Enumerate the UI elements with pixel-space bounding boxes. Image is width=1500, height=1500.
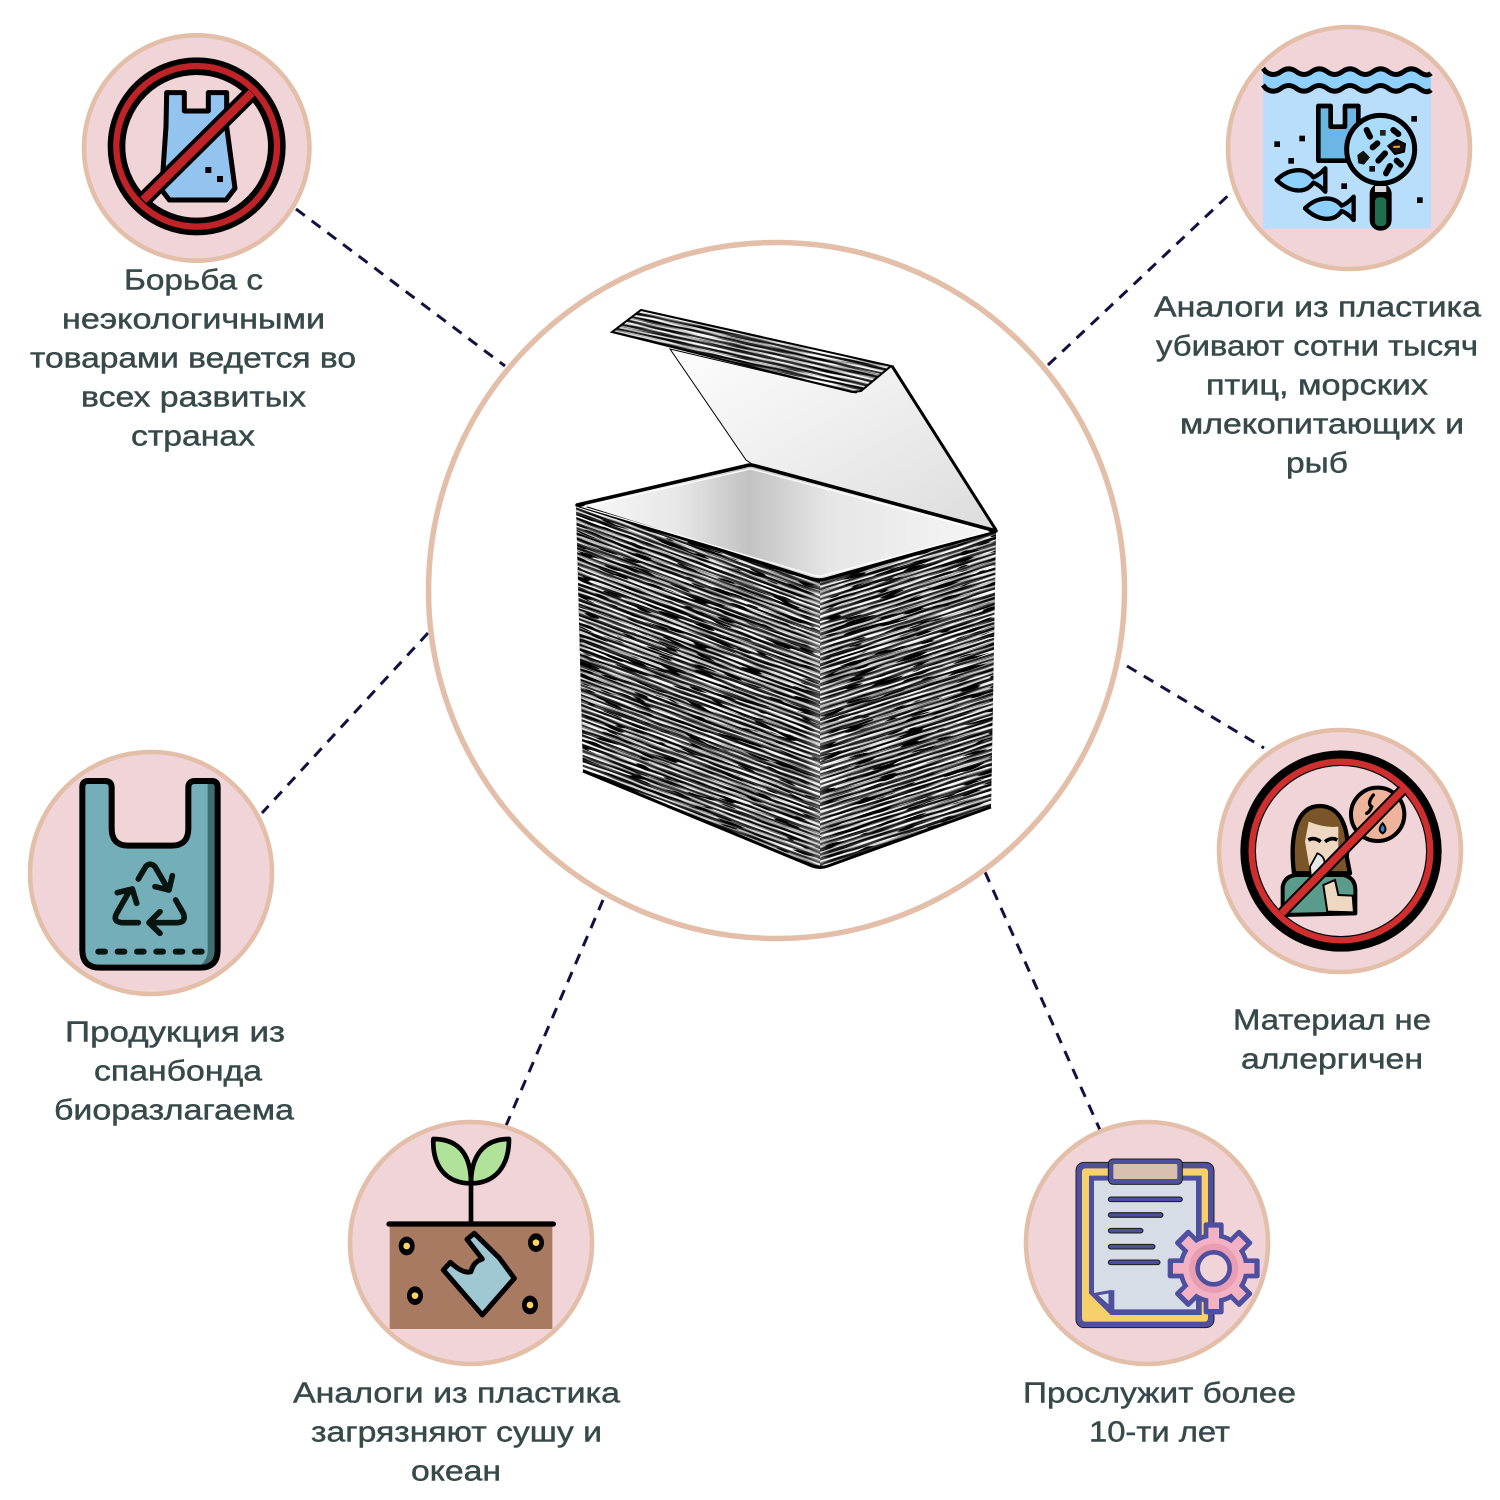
text: bottom left: океан <box>411 1456 501 1488</box>
text: top right: Аналоги из пластика <box>1154 292 1482 324</box>
icon circle: biodegradable bag <box>30 752 272 994</box>
text: bottom right: 10-ти лет <box>1089 1416 1230 1448</box>
box inner cavity <box>577 465 996 580</box>
text: top right <box>1154 292 1482 480</box>
text: top left: Борьба с <box>124 264 263 296</box>
icon circle: soil pollution <box>350 1122 592 1364</box>
dashed connector lines <box>262 190 1264 1130</box>
text: middle left: Продукция из <box>65 1016 285 1048</box>
box lid front strip <box>614 312 888 391</box>
text: top right: рыб <box>1286 448 1348 480</box>
text: middle left <box>54 1016 295 1126</box>
box lid inner side <box>670 349 996 530</box>
text: middle right: Материал не <box>1233 1004 1431 1036</box>
box right face <box>820 532 996 869</box>
box left face <box>576 506 820 869</box>
text: top left: странах <box>131 420 256 452</box>
text: top right: убивают сотни тысяч <box>1156 330 1478 362</box>
text: middle left: биоразлагаема <box>54 1094 295 1126</box>
icon: sprout and bag in soil <box>389 1139 553 1329</box>
icon circle: ocean pollution <box>1228 27 1470 269</box>
icon: crossed allergy <box>1244 754 1438 948</box>
text: top left: неэкологичными <box>62 304 325 336</box>
text: top left <box>30 264 356 452</box>
text: top right: птиц, морских <box>1206 370 1429 402</box>
icon: crossed bag <box>116 66 277 227</box>
box bottom edge <box>583 771 991 868</box>
text: middle right: аллергичен <box>1241 1044 1423 1076</box>
text: bottom right <box>1023 1378 1296 1448</box>
text: bottom right: Прослужит более <box>1023 1378 1296 1410</box>
text: bottom left <box>293 1378 621 1488</box>
text: top right: млекопитающих и <box>1180 408 1464 440</box>
icon: recyclable bag <box>82 781 218 968</box>
icon circle: not allergenic <box>1219 730 1461 972</box>
text: bottom left: загрязняют сушу и <box>311 1416 602 1448</box>
text: top left: товарами ведется во <box>30 342 356 374</box>
icon circle: no plastic bag <box>84 35 309 261</box>
box front corner highlight <box>806 585 830 865</box>
text: bottom left: Аналоги из пластика <box>293 1378 621 1410</box>
text: top left: всех развитых <box>81 382 307 414</box>
icon: clipboard and gear <box>1076 1159 1260 1328</box>
icon: bag and fish under water <box>1263 68 1431 231</box>
open box illustration <box>575 308 998 869</box>
text: middle right <box>1233 1004 1431 1076</box>
central circle <box>428 242 1124 938</box>
icon circle: durable clipboard <box>1026 1122 1268 1364</box>
text: middle left: спанбонда <box>94 1056 263 1088</box>
